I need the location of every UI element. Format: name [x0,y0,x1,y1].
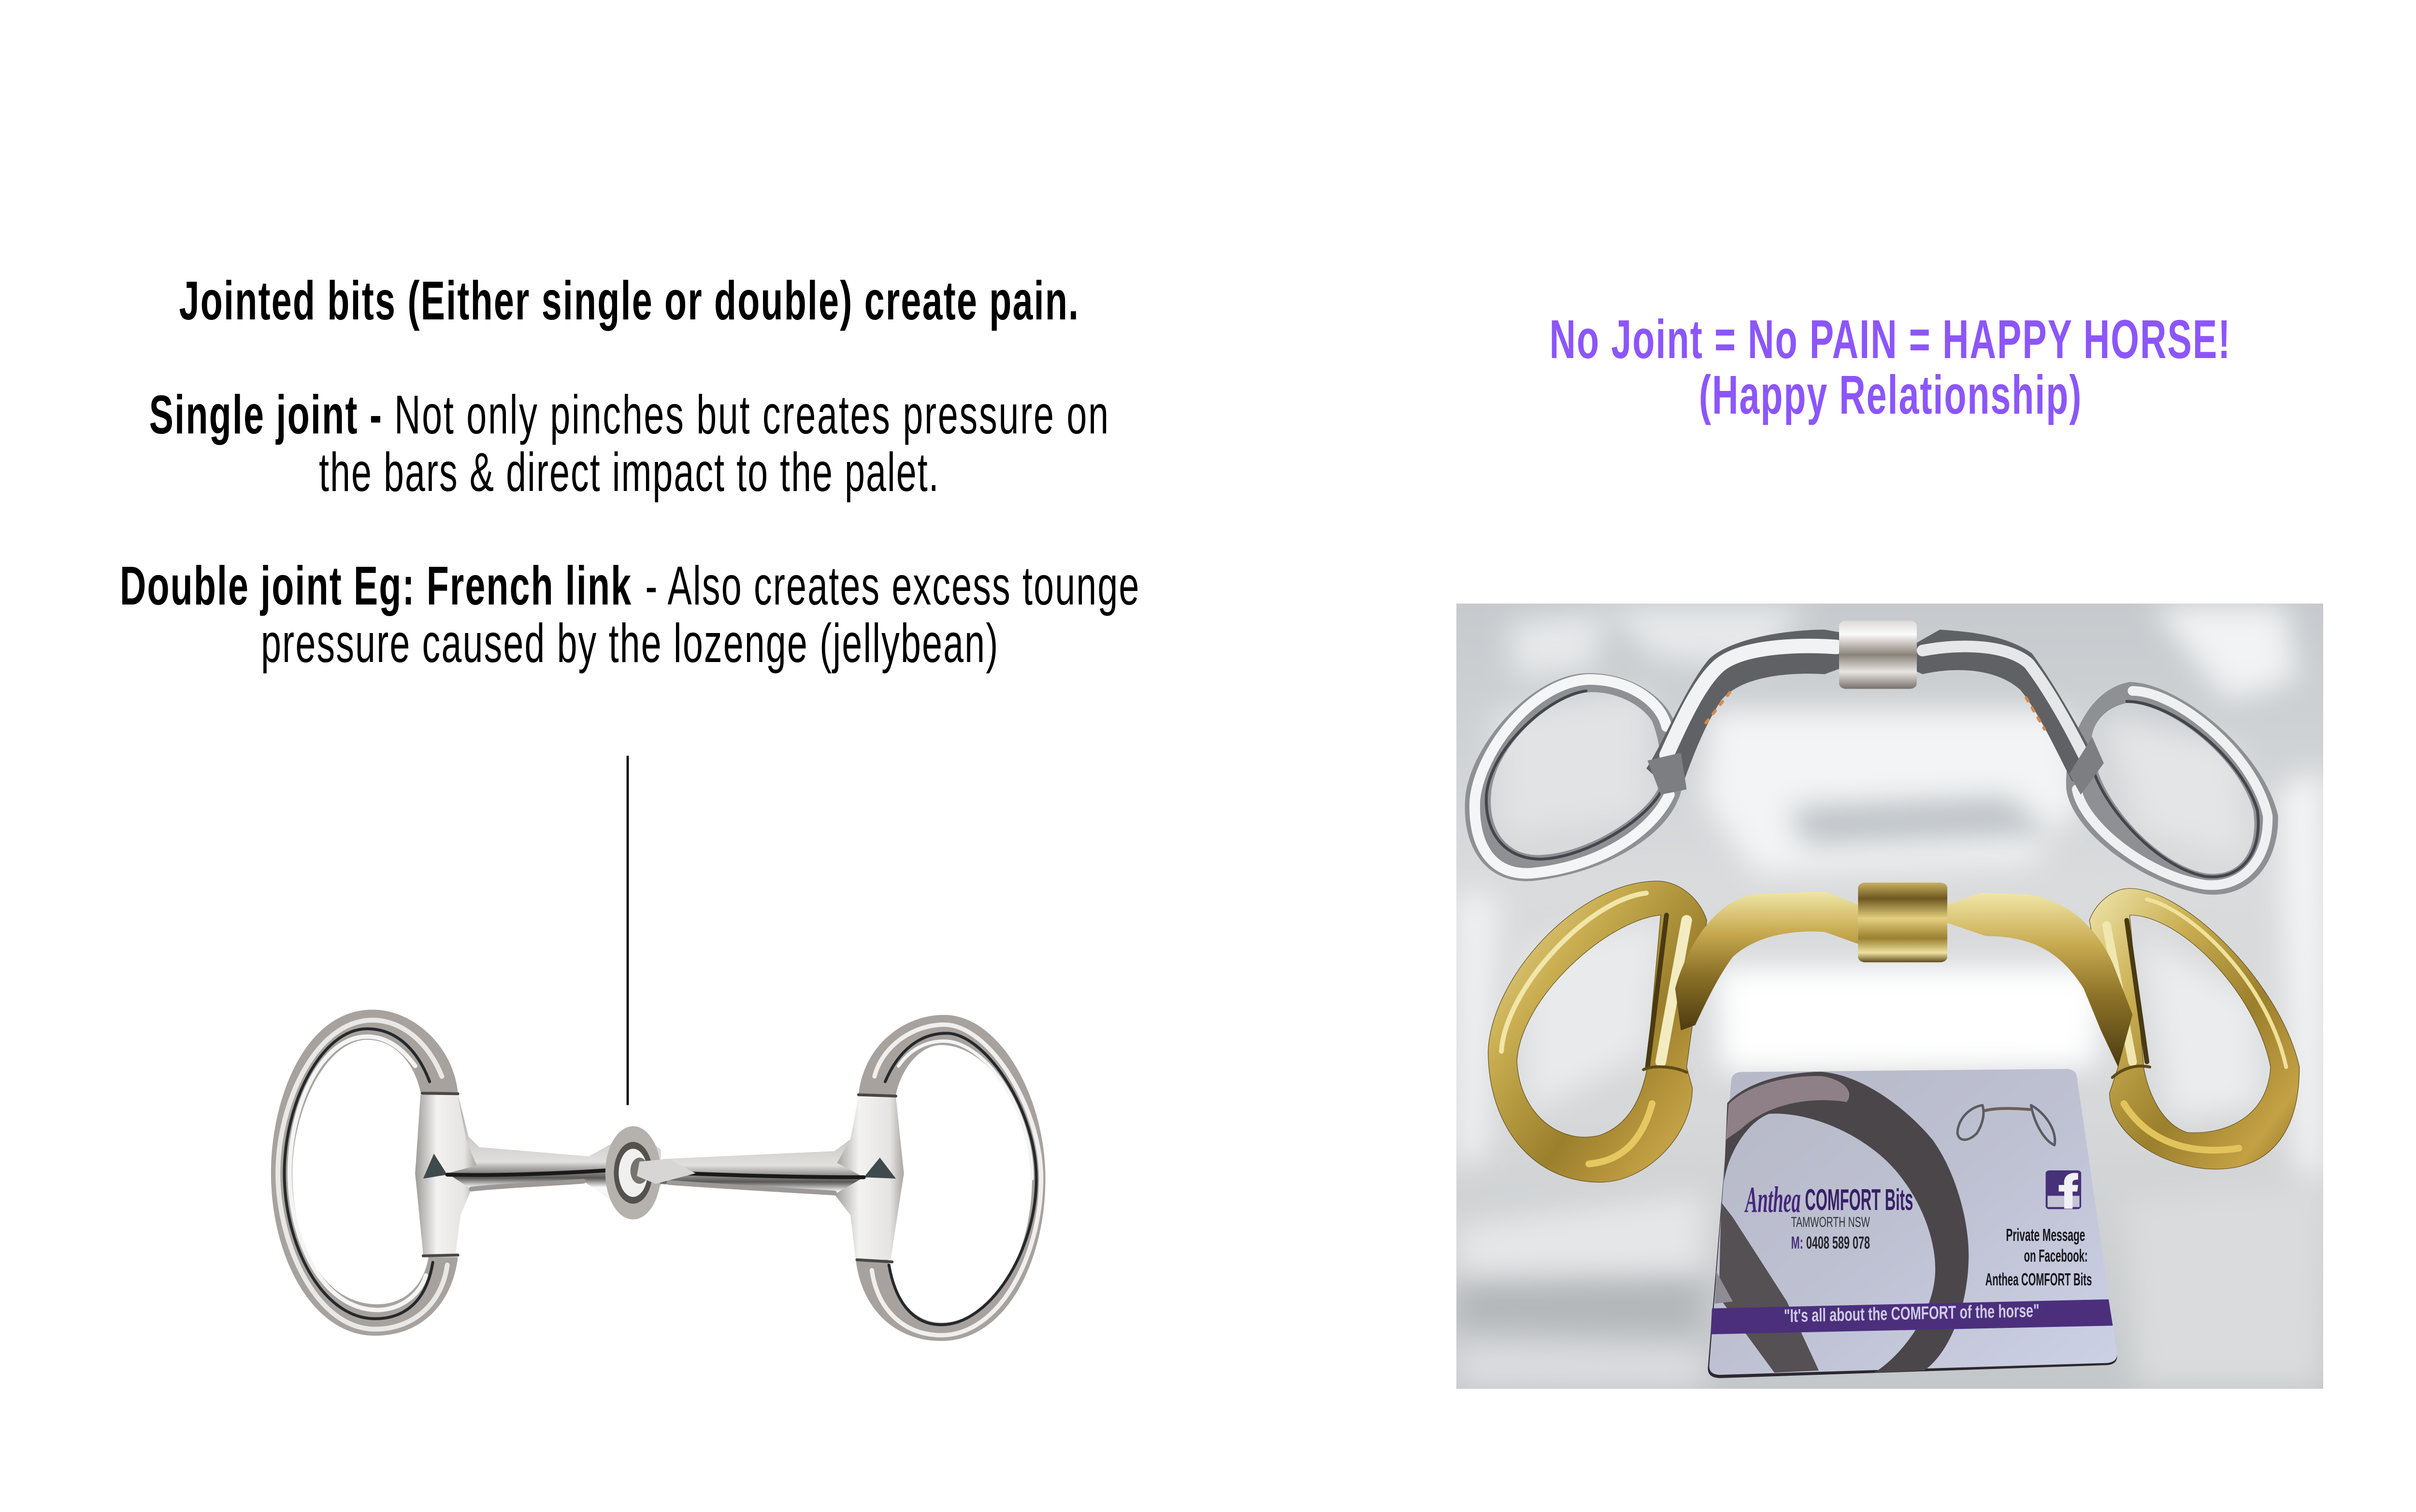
facebook icon [2046,1170,2081,1209]
mouthpiece reflections [423,1154,896,1193]
photo background [1456,604,2323,1389]
ring artwork on card [1724,1072,1969,1373]
gold mouthpiece left [1675,892,1858,1030]
gold mouthpiece right [1947,893,2132,1067]
gold eggbutt D-ring bit [1488,881,2300,1182]
card title [1744,1179,1913,1220]
ring collars [422,1093,896,1262]
text: single joint [149,385,1108,503]
business card [1708,1069,2117,1378]
right ring [856,1015,1046,1341]
text: double joint french link [120,556,1139,674]
silver cheek sleeves [1648,737,2104,794]
card body and artwork [1708,1069,2117,1378]
text: double joint french link: pressure caused by the lozenge (jellybean) [261,613,998,674]
joint loop [605,1126,696,1220]
card facebook message [1985,1225,2092,1289]
text: single joint: Not only pinches but creates pressure on [394,385,1108,446]
illustration: single jointed eggbutt snaffle bit [271,1009,1046,1341]
card facebook message: Private Message [2006,1225,2085,1245]
silver centre barrel [1839,621,1917,689]
gold left D ring [1488,881,1707,1182]
silver loose ring bit [1465,621,2278,894]
text: single joint: the bars & direct impact to the palet. [319,442,939,503]
silver mouthpiece left [1646,630,1839,784]
left cheek and mouthpiece [415,1095,661,1254]
gold right D ring [2089,889,2300,1169]
heading: no joint no pain [1550,309,2230,426]
card slogan: "It's all about the COMFORT of the horse" [1784,1300,2040,1326]
orange marks [1705,692,2044,729]
right cheek and mouthpiece [637,1097,904,1260]
silver mouthpiece right [1917,630,2098,781]
heading: no joint no pain: No Joint = No PAIN = HAPPY HORSE! [1550,309,2230,370]
card title: COMFORT Bits [1805,1183,1913,1217]
heading: jointed bits create pain: Jointed bits (Either single or double) create pain. [179,271,1079,331]
card title: Anthea [1744,1179,1801,1220]
text: double joint french link: Double joint Eg: French link [120,556,631,617]
photo: two comfort bits with business card [1456,604,2324,1389]
text block: jointed bits explanation [120,271,1139,674]
card facebook message: on Facebook: [2024,1246,2088,1266]
card location and phone: M: 0408 589 078 [1791,1233,1870,1253]
card location and phone: TAMWORTH NSW [1791,1214,1870,1230]
gold centre barrel [1858,883,1947,962]
gold ring highlights [1501,893,2286,1164]
pointer line to joint [627,756,629,1105]
purple band [1711,1299,2113,1334]
surface reflections [1456,606,2324,1386]
heading: no joint no pain: (Happy Relationship) [1699,365,2081,426]
card facebook message: Anthea COMFORT Bits [1985,1270,2092,1289]
right cheek highlight [834,1097,904,1260]
text: single joint: Single joint - [149,385,382,446]
card location and phone [1791,1214,1870,1253]
left ring [271,1009,458,1336]
left cheek highlight [415,1095,476,1254]
silver right ring [2066,682,2278,894]
small bit image on card [1957,1105,2055,1145]
silver left ring [1465,673,1683,881]
text: double joint french link: - Also creates excess tounge [645,556,1139,617]
